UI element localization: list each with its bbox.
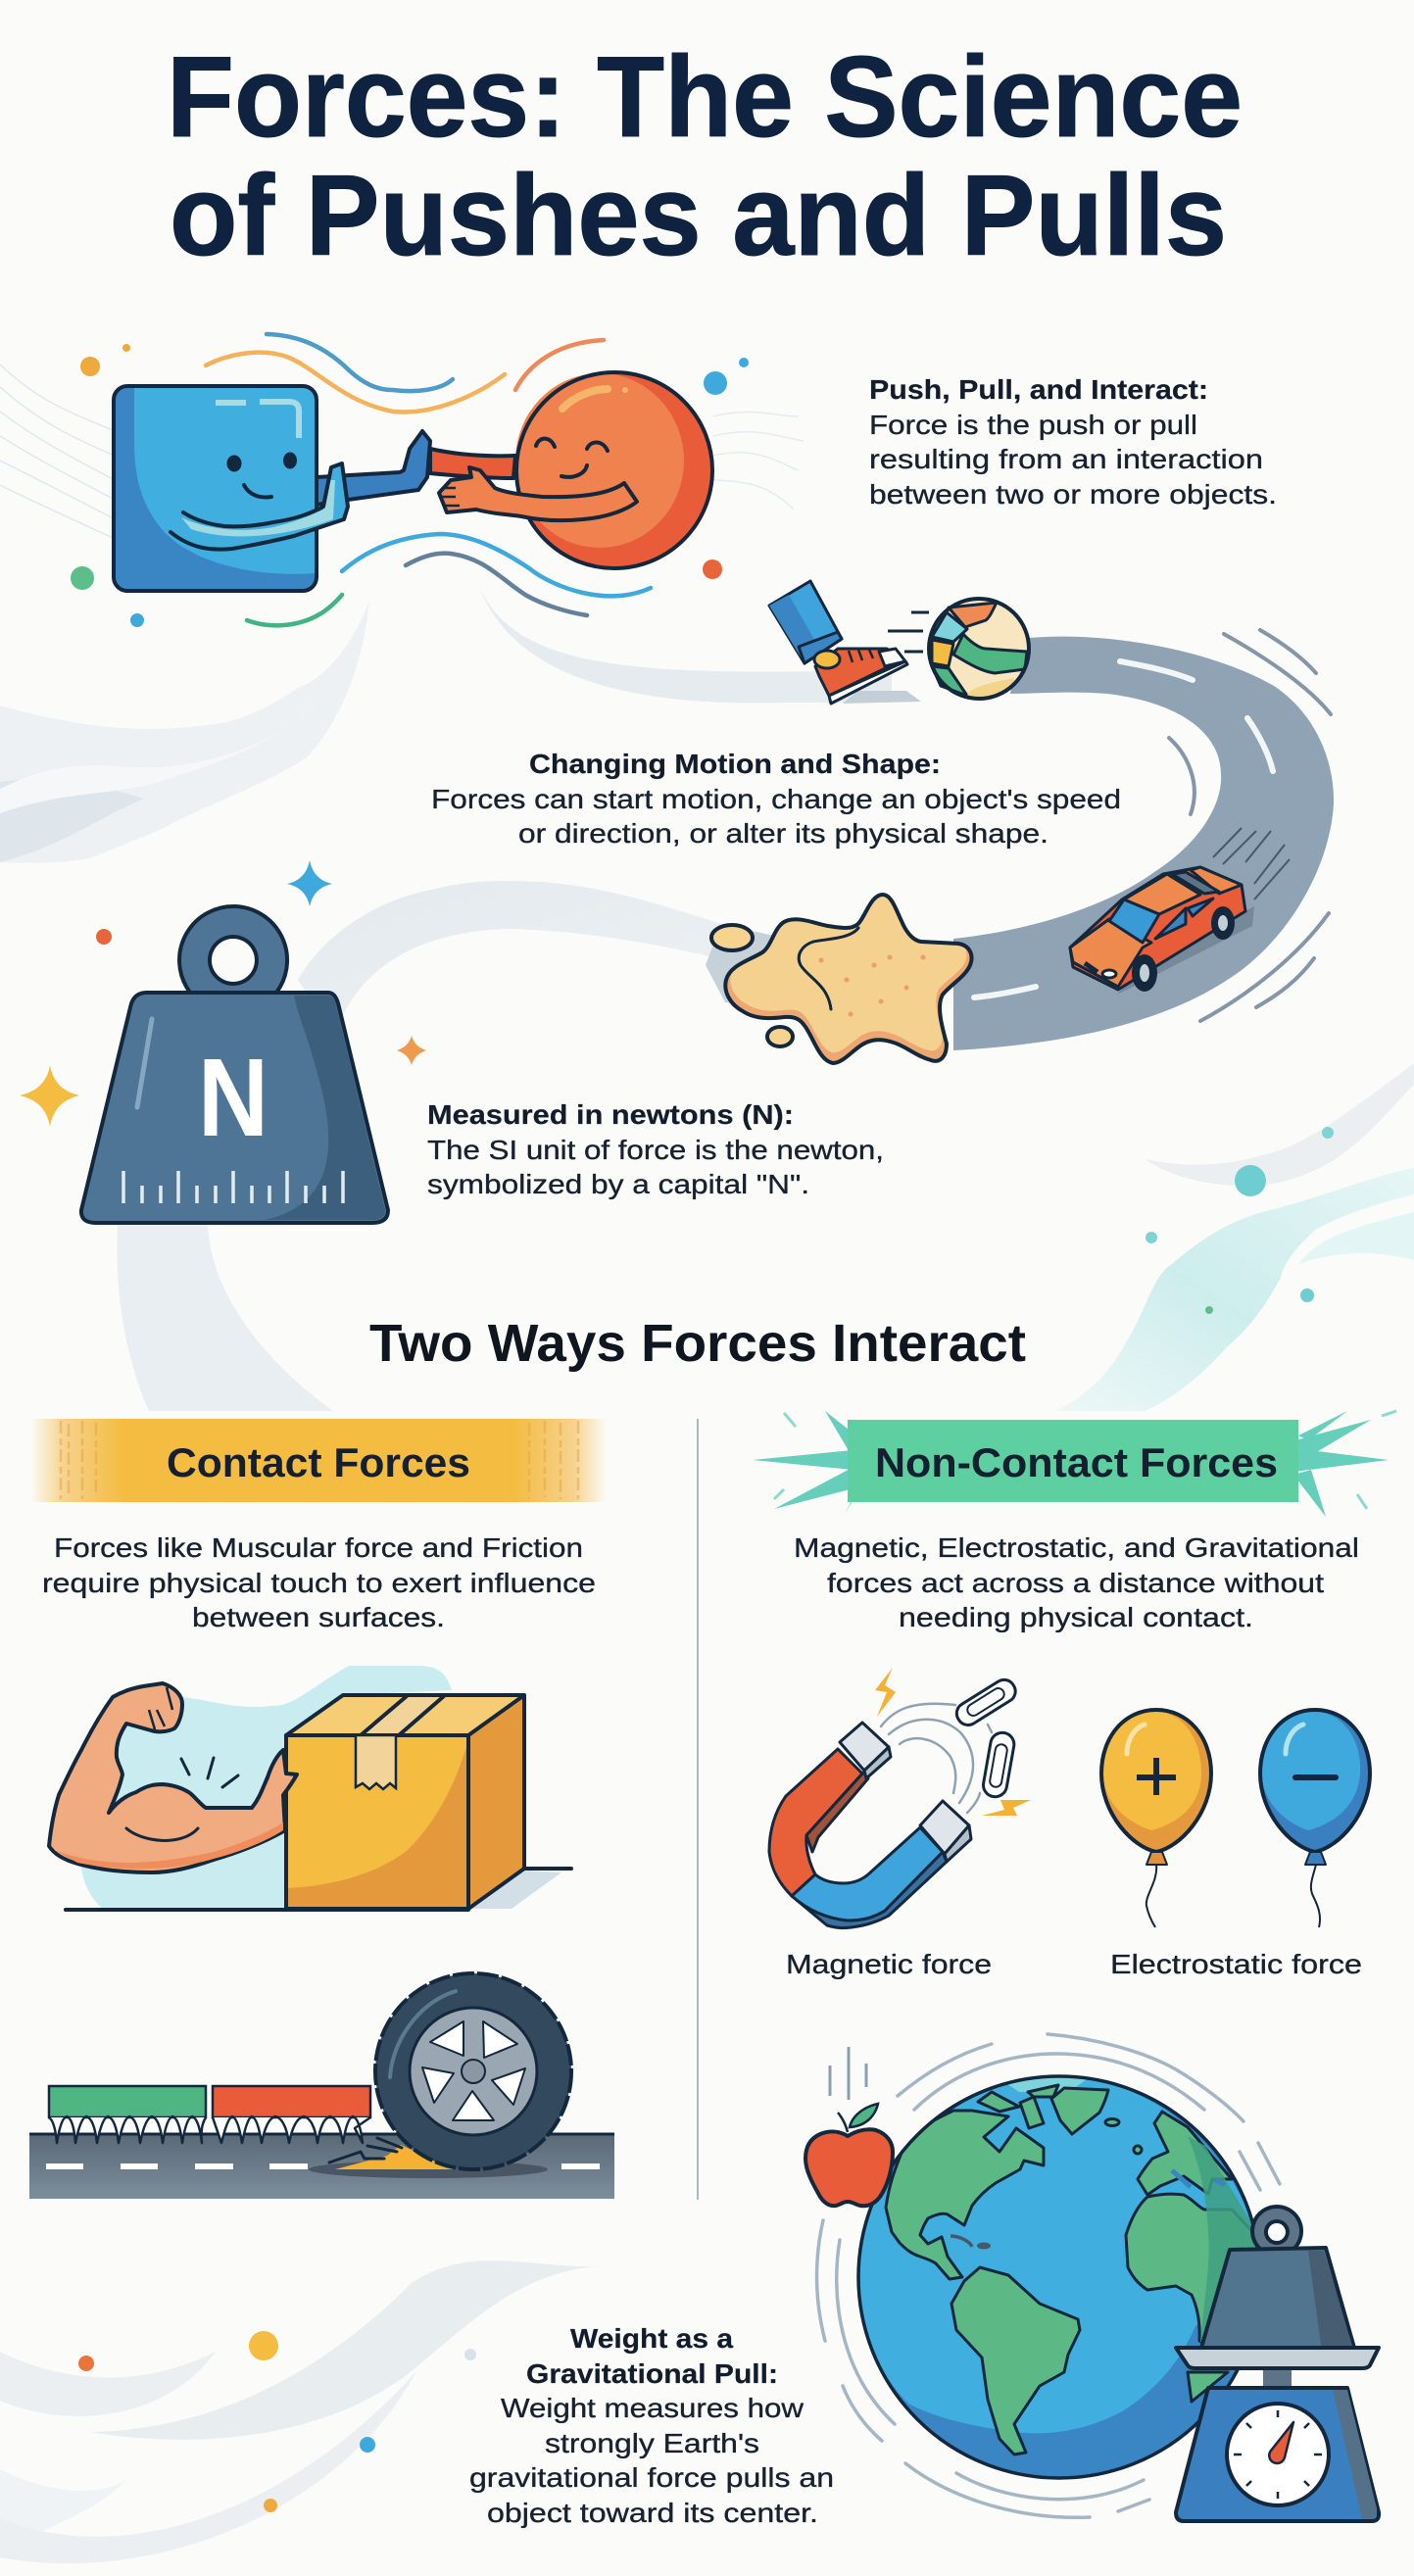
divider [697,1419,699,2200]
icon: sparkles [20,860,426,1127]
illustration: muscular force pushing box [49,1666,571,1910]
text: push pull interact [869,374,1277,510]
text: push pull interact: between two or more objects. [869,479,1277,510]
label: magnetic force: Magnetic force [786,1949,992,1979]
illustration: magnet [769,1668,1031,1928]
text: changing motion and shape: or direction, or alter its physical shape. [518,818,1048,849]
panel: non-contact forces [469,1411,1396,2528]
text: push pull interact: resulting from an interaction [869,444,1263,474]
text: contact description [42,1532,596,1632]
banner: contact forces [29,1419,608,1502]
decorative dots [71,344,1334,2512]
text: push pull interact: Force is the push or pull [869,410,1197,440]
illustration: balloons [1101,1710,1370,1927]
text: contact description: between surfaces. [192,1602,445,1632]
text: weight as a gravitational pull: strongly Earth's [545,2428,759,2458]
text: weight as a gravitational pull: object toward its center. [487,2498,818,2528]
section heading: Two Ways Forces Interact [369,1314,1026,1373]
text: push pull interact: Push, Pull, and Interact: [869,374,1208,405]
text: weight as a gravitational pull: Weight measures how [501,2393,805,2423]
illustration: deformed dough star [711,895,972,1063]
text: weight as a gravitational pull: Weight as a [570,2323,733,2354]
text: non-contact description: needing physical contact. [899,1602,1253,1632]
title [167,32,1243,279]
label: electrostatic force: Electrostatic force [1110,1949,1362,1979]
illustration: newton weight: N [198,1036,268,1159]
road [953,630,1334,1050]
title: Forces: The Science [167,32,1243,161]
illustration: friction with tire [29,1973,614,2199]
panel: contact forces [29,1419,614,2199]
illustration: block and ball pushing [114,334,712,625]
wavy motion lines [206,334,651,625]
text: changing motion and shape: Changing Motion and Shape: [529,749,941,779]
title: of Pushes and Pulls [170,151,1227,279]
text: changing motion and shape: Forces can start motion, change an object's speed [431,784,1121,814]
banner: non-contact forces [753,1411,1396,1517]
illustration: foot kicking ball [769,581,1029,704]
banner: non-contact forces: Non-Contact Forces [875,1439,1278,1485]
text: measured in newtons: Measured in newtons (N): [427,1099,794,1130]
orange ball character [515,372,712,568]
text: non-contact description: Magnetic, Electrostatic, and Gravitational [794,1532,1359,1563]
text: measured in newtons [427,1099,884,1199]
text: contact description: Forces like Muscular force and Friction [54,1532,583,1563]
blue block character [114,386,317,591]
pushing arms [171,431,637,550]
text: weight as a gravitational pull: gravitational force pulls an [469,2462,834,2493]
illustration: car [1070,867,1254,995]
text: weight as a gravitational pull [469,2323,834,2528]
text: measured in newtons: The SI unit of force is the newton, [427,1135,884,1165]
text: non-contact description [794,1532,1359,1632]
text: non-contact description: forces act across a distance without [827,1568,1324,1598]
text: weight as a gravitational pull: Gravitational Pull: [526,2358,778,2389]
text: contact description: require physical touch to exert influence [42,1568,596,1598]
illustration: earth with apple and scale [805,2034,1379,2521]
illustration: newton weight [81,906,388,1223]
text: changing motion and shape [431,749,1121,849]
text: measured in newtons: symbolized by a capital "N". [427,1169,809,1199]
banner: contact forces: Contact Forces [167,1439,470,1485]
